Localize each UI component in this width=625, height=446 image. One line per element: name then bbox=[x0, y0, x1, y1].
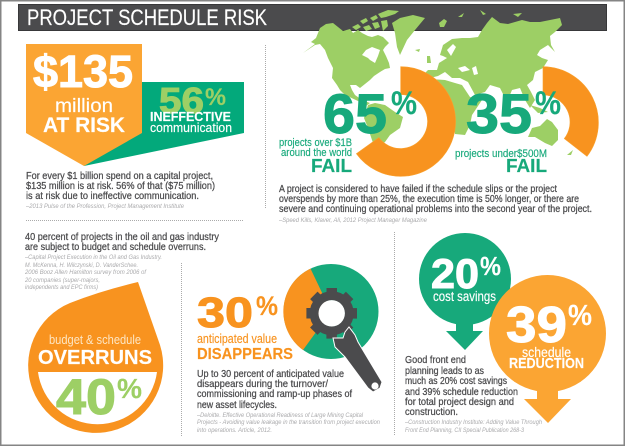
text block: definition of failure: A project is considered to have failed if the schedule slips or the project bbox=[279, 183, 557, 195]
statistic: 35 percent fail: projects under$500M bbox=[455, 148, 547, 160]
orange shield: $135 million at risk bbox=[26, 44, 142, 166]
orange shield: $135 million at risk: AT RISK bbox=[43, 114, 125, 137]
statistic: 65 percent fail: % bbox=[391, 85, 417, 121]
icon: gear bbox=[306, 288, 357, 339]
green banner: ineffective communication: % bbox=[205, 84, 226, 111]
panel: at risk graphic bbox=[26, 44, 244, 166]
title banner: PROJECT SCHEDULE RISK bbox=[27, 5, 267, 30]
text block: front end planning: much as 20% cost savings bbox=[405, 375, 507, 387]
statistic: 65 percent fail: FAIL bbox=[311, 156, 352, 176]
text block: front end planning: construction. bbox=[405, 406, 458, 418]
statistic: 65 percent fail: projects over $1B bbox=[279, 137, 352, 149]
text block: overruns: –Capital Project Execution in the Oil and Gas Industry. bbox=[24, 254, 162, 261]
drop graphic: overruns 40 percent bbox=[28, 282, 163, 433]
drop graphic: overruns 40 percent: % bbox=[117, 373, 142, 404]
green banner: ineffective communication: 56 bbox=[159, 80, 204, 121]
drop graphic: overruns 40 percent: budget & schedule bbox=[49, 332, 141, 347]
text block: anticipated value: new asset lifecycles. bbox=[197, 399, 277, 411]
green banner: ineffective communication bbox=[84, 80, 244, 166]
pie chart with gear and wrench bbox=[283, 264, 382, 392]
pin: 39 percent schedule reduction: schedule bbox=[522, 344, 571, 360]
text block: definition of failure: –Speed Kills, Klaver, Ali, 2012 Project Manager Magazine bbox=[278, 217, 427, 224]
text block: anticipated value: commissioning and ramp-up phases of bbox=[197, 388, 352, 400]
statistic: 65 percent fail: 65 bbox=[323, 82, 387, 145]
text block: at risk explanation bbox=[25, 170, 215, 210]
text block: anticipated value: into operations. Article, 2012. bbox=[197, 427, 272, 434]
pin: 39 percent schedule reduction: % bbox=[568, 300, 592, 332]
text block: front end planning: planning leads to as bbox=[405, 365, 484, 377]
text block: front end planning: Front End Planning, CII Special Publication 268-3 bbox=[405, 427, 524, 434]
statistic: 30 percent disappears: % bbox=[256, 291, 278, 321]
world map bbox=[303, 10, 573, 155]
text block: overruns: 20 companies (super-majors, bbox=[24, 277, 100, 284]
statistic: 30 percent disappears: anticipated value bbox=[197, 331, 277, 346]
green banner: ineffective communication: INEFFECTIVE bbox=[150, 110, 231, 124]
statistic: 35 percent fail: 35 bbox=[466, 82, 532, 145]
drop graphic: overruns 40 percent: 40 bbox=[56, 369, 116, 425]
statistic: 35 percent fail: % bbox=[535, 85, 561, 121]
statistic: 30 percent disappears bbox=[197, 289, 293, 363]
green banner: ineffective communication: communication bbox=[150, 120, 232, 135]
statistic: 65 percent fail bbox=[279, 82, 417, 176]
text block: overruns: 40 percent of projects in the oil and gas industry bbox=[25, 231, 220, 243]
orange shield: $135 million at risk: $135 bbox=[33, 46, 133, 97]
text block: front end planning bbox=[404, 354, 542, 434]
text block: anticipated value: Projects - Avoiding value leakage in the transition from project execution bbox=[197, 419, 380, 426]
text block: anticipated value: Up to 30 percent of anticipated value bbox=[197, 368, 344, 380]
orange shield: $135 million at risk: million bbox=[55, 96, 113, 117]
drop graphic: overruns 40 percent: OVERRUNS bbox=[38, 347, 152, 369]
statistic: 65 percent fail: around the world bbox=[281, 147, 352, 159]
donut: 35 percent bbox=[543, 67, 598, 156]
text block: overruns: are subject to budget and schedule overruns. bbox=[25, 241, 206, 253]
text block: overruns: independents and EPC firms) bbox=[25, 284, 98, 291]
statistic: 35 percent fail bbox=[455, 82, 561, 176]
text block: overruns: 2006 Booz Allen Hamilton survey from 2006 of bbox=[24, 269, 147, 276]
pin: 39 percent schedule reduction: 39 bbox=[506, 296, 567, 353]
text block: front end planning: and 39% schedule reduction bbox=[405, 386, 518, 398]
pin: 39 percent schedule reduction bbox=[489, 275, 606, 423]
icon: wrench bbox=[333, 327, 382, 392]
text block: anticipated value: –Deloitte. Effective Operational Readiness of Large Mining Capital bbox=[196, 412, 363, 419]
pin: 20 percent cost savings: 20 bbox=[431, 250, 479, 297]
pin: 20 percent cost savings: % bbox=[480, 251, 501, 281]
text block: definition of failure bbox=[278, 183, 592, 224]
text block: at risk explanation: –2013 Pulse of the Profession, Project Management Institute bbox=[25, 203, 184, 210]
text block: front end planning: –Construction Industry Institute: Adding Value Through bbox=[404, 419, 542, 426]
statistic: 30 percent disappears: 30 bbox=[197, 289, 253, 337]
text block: at risk explanation: is at risk due to ineffective communication. bbox=[26, 190, 199, 202]
statistic: 30 percent disappears: DISAPPEARS bbox=[197, 346, 293, 363]
text block: front end planning: for total project design and bbox=[405, 396, 514, 408]
statistic: 35 percent fail: FAIL bbox=[506, 156, 547, 176]
text block: overruns: M. McKenna, H. Wilczynski, D. VanderSchee. bbox=[25, 262, 138, 269]
text block: at risk explanation: $135 million is at risk. 56% of that ($75 million) bbox=[26, 180, 215, 192]
donut: 65 percent bbox=[356, 67, 456, 176]
pin: 20 percent cost savings: cost savings bbox=[433, 289, 496, 304]
pin: 39 percent schedule reduction: REDUCTION bbox=[509, 355, 584, 372]
text block: anticipated value: disappears during the turnover/ bbox=[197, 378, 328, 390]
pin: 20 percent cost savings bbox=[419, 233, 511, 350]
text block: at risk explanation: For every $1 billion spend on a capital project, bbox=[26, 170, 213, 182]
text block: overruns bbox=[24, 231, 220, 291]
text block: anticipated value bbox=[196, 368, 380, 434]
text block: front end planning: Good front end bbox=[405, 354, 466, 366]
title banner bbox=[18, 4, 606, 30]
